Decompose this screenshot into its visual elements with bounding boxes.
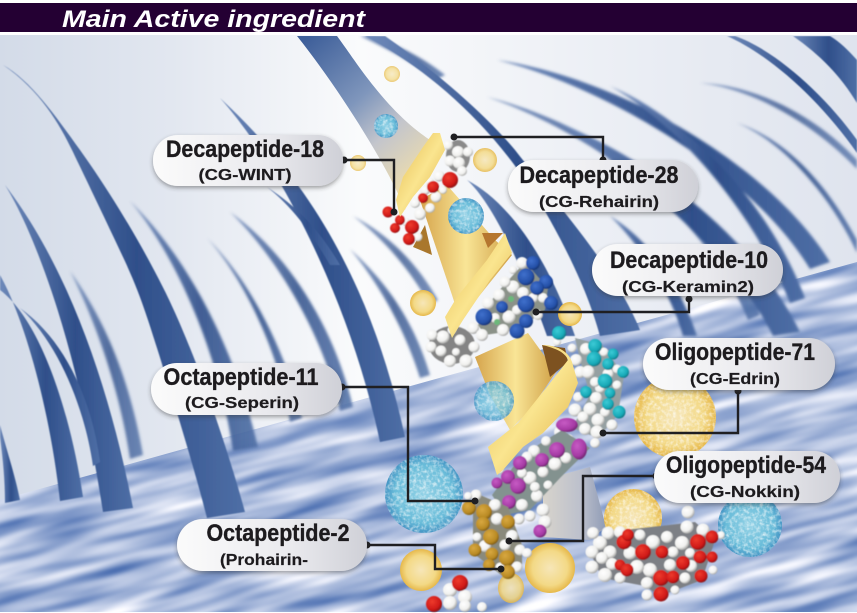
line: octapeptide-2 (364, 542, 504, 572)
leader lines (338, 134, 742, 572)
far right hairs (70, 36, 857, 459)
label: Octapeptide-11 (151, 363, 342, 415)
header bar (0, 3, 857, 33)
line: decapeptide-18 (340, 156, 398, 216)
molecule: oligopeptide-71 (552, 326, 629, 448)
label: Oligopeptide-71: (CG-Edrin) (690, 371, 780, 388)
label: Decapeptide-10: Decapeptide-10 (610, 247, 768, 274)
label: Oligopeptide-54: (CG-Nokkin) (690, 484, 800, 501)
line: oligopeptide-71 (600, 388, 742, 436)
label: Decapeptide-28: Decapeptide-28 (520, 162, 678, 189)
label: Decapeptide-18 (153, 135, 343, 186)
label: Decapeptide-28 (508, 160, 698, 212)
label: Octapeptide-11: (CG-Seperin) (185, 395, 299, 412)
label: Decapeptide-18: Decapeptide-18 (166, 136, 324, 163)
label: Decapeptide-10: (CG-Keramin2) (622, 279, 754, 296)
molecule: large red cluster (586, 506, 725, 602)
molecule: grey cluster (426, 326, 480, 368)
central hair shaft (297, 36, 606, 540)
molecule: decapeptide-18 (382, 172, 458, 245)
line: decapeptide-10 (532, 296, 692, 316)
line: decapeptide-28 (450, 134, 606, 164)
label: Decapeptide-28: (CG-Rehairin) (539, 194, 659, 211)
label: Oligopeptide-54 (654, 451, 840, 503)
line: octapeptide-11 (338, 384, 478, 504)
label: Decapeptide-10 (592, 244, 783, 296)
label: Octapeptide-2 (177, 519, 367, 571)
line: oligopeptide-54 (506, 472, 660, 544)
hair strands (0, 36, 857, 518)
gold spheres (350, 66, 716, 603)
label: Octapeptide-11: Octapeptide-11 (164, 364, 318, 391)
title: Main Active ingredient (62, 6, 366, 33)
label: Oligopeptide-71 (643, 338, 835, 390)
label: Octapeptide-2: (Prohairin- (220, 552, 308, 569)
label: Decapeptide-18: (CG-WINT) (198, 167, 292, 184)
molecules (382, 140, 725, 612)
spheres (350, 66, 782, 603)
gold ribbon helix (396, 133, 578, 475)
molecule: magenta chain (492, 418, 590, 538)
molecule: decapeptide-28 (426, 140, 473, 186)
label: Octapeptide-2: Octapeptide-2 (206, 520, 350, 547)
molecule: bottom red fragment (426, 575, 487, 612)
label: Oligopeptide-71: Oligopeptide-71 (655, 339, 815, 366)
label: Oligopeptide-54: Oligopeptide-54 (666, 452, 827, 479)
molecule: gold octapeptide chain (462, 490, 532, 579)
molecule: decapeptide-10 (467, 256, 558, 341)
blue spheres (374, 114, 782, 557)
